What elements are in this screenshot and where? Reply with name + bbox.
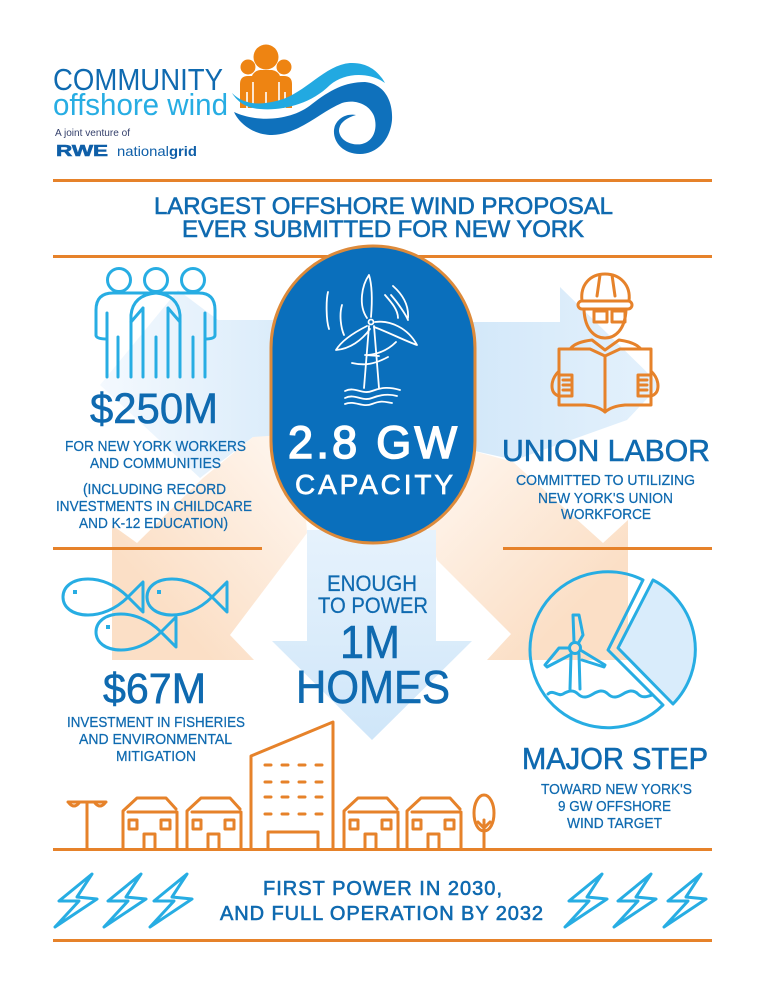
description: TOWARD NEW YORK'S: [541, 782, 692, 798]
icon: tall building: [251, 722, 333, 849]
rule lines: [53, 179, 712, 942]
icon: building windows: [265, 765, 322, 814]
panel: homes powered: TO POWER: [318, 593, 428, 618]
title: EVER SUBMITTED FOR NEW YORK: [182, 216, 584, 243]
description: [56, 439, 252, 532]
icon: pie chart with turbine: [530, 572, 695, 728]
icon: houses: [123, 798, 461, 849]
panel: major step: [522, 572, 708, 832]
logo: wordmark line 2: offshore wind: [53, 87, 228, 122]
logo: joint venture: A joint venture of: [55, 128, 130, 139]
heading: UNION LABOR: [502, 433, 710, 468]
icon: fish eyes: [73, 590, 161, 629]
description: WIND TARGET: [567, 816, 662, 832]
description: COMMITTED TO UTILIZING: [516, 473, 695, 489]
footer text: FIRST POWER IN 2030,: [263, 878, 502, 900]
background arrows: [100, 287, 660, 740]
description: INVESTMENT IN FISHERIES: [67, 715, 245, 731]
icons: left lightning bolts: [55, 874, 192, 927]
central capacity pill: [271, 246, 475, 543]
logo: nationalgrid: nationalgrid: [117, 143, 197, 159]
icon: tree: [474, 795, 494, 849]
skyline illustration: [68, 722, 494, 849]
footer text: AND FULL OPERATION BY 2032: [220, 903, 543, 925]
panel: workers: [56, 268, 252, 532]
logo: light wave: [232, 63, 385, 109]
icon: street lamp: [68, 802, 106, 849]
amount: $250M: [90, 385, 218, 433]
panel: fisheries: [63, 579, 245, 765]
description: [541, 782, 692, 832]
panel: homes powered: [296, 571, 450, 713]
icon: three people: [96, 268, 215, 377]
panel: homes powered: 1M: [340, 616, 400, 668]
capacity label: CAPACITY: [295, 469, 453, 500]
description: NEW YORK'S UNION: [538, 491, 673, 507]
description: INVESTMENTS IN CHILDCARE: [56, 499, 252, 515]
description: WORKFORCE: [561, 507, 651, 523]
description: [67, 715, 245, 765]
logo: RWE: RWE: [56, 143, 108, 160]
logo: wordmark: COMMUNITY: [53, 62, 223, 97]
description: 9 GW OFFSHORE: [558, 799, 671, 815]
description: (INCLUDING RECORD: [83, 482, 226, 498]
icons: right lightning bolts: [565, 874, 706, 927]
title: LARGEST OFFSHORE WIND PROPOSAL: [154, 193, 613, 220]
logo: dark wave: [234, 82, 392, 154]
description: AND K-12 EDUCATION): [79, 516, 228, 532]
description: MITIGATION: [116, 749, 196, 765]
description: FOR NEW YORK WORKERS: [65, 439, 246, 455]
panel: homes powered: ENOUGH: [327, 571, 417, 596]
icon: wind turbine: [327, 275, 417, 405]
description: [516, 473, 695, 523]
title: [154, 193, 613, 243]
capacity value: 2.8 GW: [288, 417, 458, 468]
heading: MAJOR STEP: [522, 741, 708, 776]
icon: three fish: [63, 579, 227, 650]
icon: worker reading: [552, 274, 658, 412]
logo: community people icon: [240, 44, 292, 110]
logo: [53, 44, 392, 160]
panel: union labor: [502, 274, 710, 523]
footer text: [220, 878, 543, 925]
description: AND COMMUNITIES: [90, 456, 221, 472]
description: AND ENVIRONMENTAL: [79, 732, 232, 748]
panel: homes powered: HOMES: [296, 661, 450, 713]
amount: $67M: [103, 665, 206, 713]
